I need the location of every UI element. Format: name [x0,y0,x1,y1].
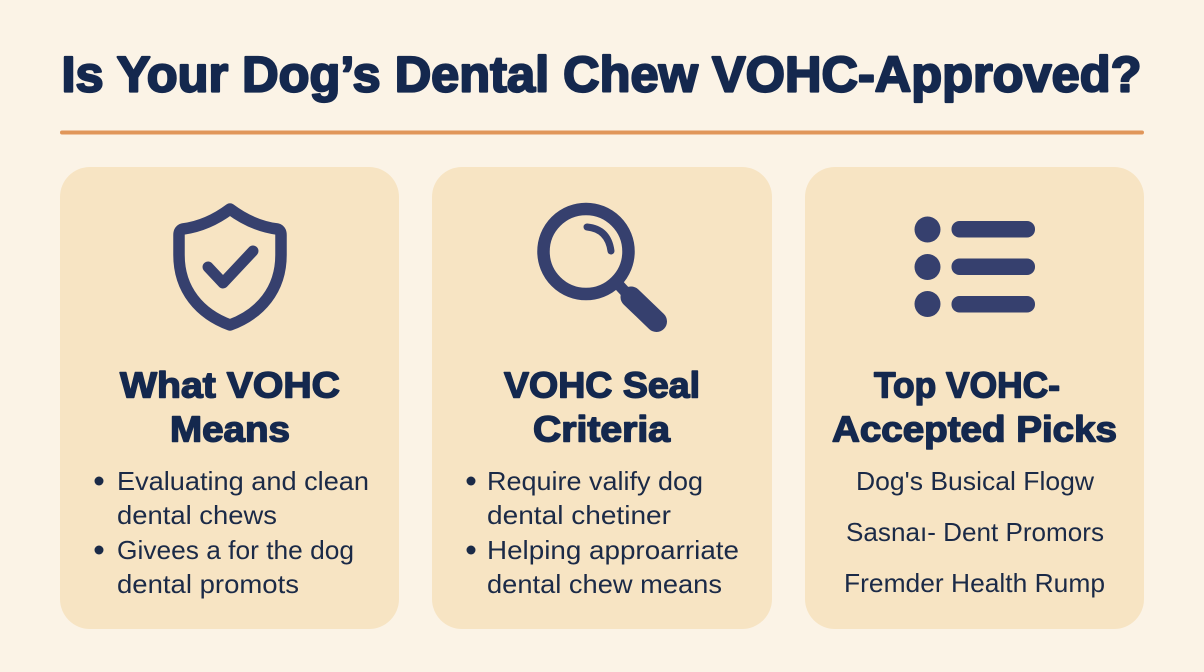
heading: VOHC Seal Criteria [504,364,700,450]
product list [844,466,1105,598]
bullet list: What VOHC Means: dental chews [117,500,277,530]
bullet list: VOHC Seal Criteria: dental chetiner [487,500,671,530]
bullet list: VOHC Seal Criteria: Helping approarriate [487,535,739,565]
heading: What VOHC Means: Means [170,408,290,450]
heading: VOHC Seal Criteria: VOHC Seal [504,364,700,406]
bullet list: What VOHC Means: Evaluating and clean [117,466,369,496]
bullet list: What VOHC Means: Givees a for the dog [117,535,354,565]
icon: list [914,216,1035,317]
heading: What VOHC Means: What VOHC [120,364,340,406]
bullet list: What VOHC Means [94,466,369,599]
panel: What VOHC Means [60,167,399,629]
product list: Dog's Busical Flogw [856,466,1094,496]
icon: shield with check [179,209,281,325]
product list: Fremder Health Rump [844,568,1105,598]
bullet list: What VOHC Means: dental promots [117,569,299,599]
bullet list: VOHC Seal Criteria [466,466,739,599]
heading: Top VOHC-Accepted Picks [832,364,1117,450]
panel: VOHC Seal Criteria [432,167,772,629]
product list: Sasnaı- Dent Promors [846,517,1104,547]
heading: Top VOHC-Accepted Picks: Top VOHC- [874,364,1060,406]
panel: Top VOHC-Accepted Picks [805,167,1144,629]
heading: VOHC Seal Criteria: Criteria [533,408,671,450]
heading: Top VOHC-Accepted Picks: Accepted Picks [832,408,1117,450]
heading: What VOHC Means [120,364,340,450]
bullet list: VOHC Seal Criteria: Require valify dog [487,466,703,496]
icon: magnifying glass [544,209,656,322]
title: Is Your Dog’s Dental Chew VOHC-Approved? [62,46,1142,102]
bullet list: VOHC Seal Criteria: dental chew means [487,569,722,599]
